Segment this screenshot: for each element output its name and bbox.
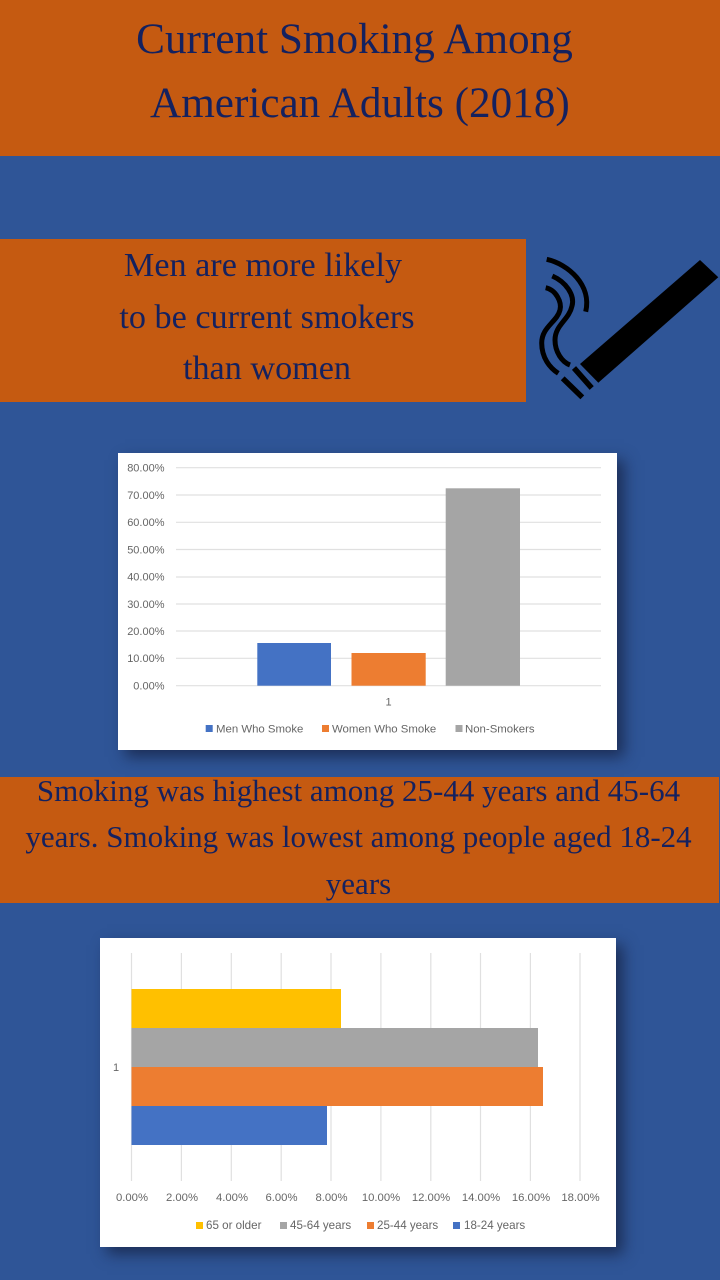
findings text: years. Smoking was lowest among people aged 18-24 xyxy=(25,819,692,854)
horizontal bar chart xyxy=(113,953,600,1232)
title xyxy=(136,16,573,127)
horizontal bar chart: 18-24 years xyxy=(464,1219,525,1232)
callout text: than women xyxy=(183,350,351,387)
bar chart: 80.00% xyxy=(127,462,165,474)
findings text: years xyxy=(326,866,391,900)
horizontal bar chart: 25-44 years xyxy=(377,1219,438,1232)
title: American Adults (2018) xyxy=(150,80,570,127)
age findings banner xyxy=(0,777,719,903)
horizontal bar chart: 18.00% xyxy=(561,1192,600,1204)
horizontal bar chart: 45-64 years xyxy=(290,1219,351,1232)
horizontal bar chart: 8.00% xyxy=(315,1192,348,1204)
bar chart: 60.00% xyxy=(127,517,165,529)
bar chart: 20.00% xyxy=(127,626,165,638)
findings text xyxy=(25,772,692,900)
panel: men vs women callout xyxy=(0,239,526,402)
bar chart: Men Who Smoke xyxy=(216,724,303,736)
callout text xyxy=(119,247,415,387)
callout text: to be current smokers xyxy=(119,298,415,336)
bar chart: 0.00% xyxy=(133,680,165,692)
horizontal bar chart: 6.00% xyxy=(265,1192,298,1204)
horizontal bar chart: 4.00% xyxy=(216,1192,248,1204)
horizontal bar chart: 1 xyxy=(113,1062,119,1074)
callout text: Men are more likely xyxy=(124,247,402,284)
horizontal bar chart: 16.00% xyxy=(512,1192,550,1204)
horizontal bar chart: 14.00% xyxy=(462,1192,500,1204)
bar chart: 40.00% xyxy=(127,572,165,584)
bar chart: 10.00% xyxy=(127,653,165,665)
panel: bar chart of smoking by sex xyxy=(118,453,617,750)
bar chart: 30.00% xyxy=(127,599,165,611)
horizontal bar chart: 0.00% xyxy=(116,1192,148,1204)
bar chart: 1 xyxy=(385,696,392,708)
horizontal bar chart: 65 or older xyxy=(206,1219,262,1232)
horizontal bar chart: 2.00% xyxy=(166,1192,198,1204)
title: Current Smoking Among xyxy=(136,16,573,63)
bar chart: 50.00% xyxy=(127,544,165,556)
bar chart: 70.00% xyxy=(127,490,165,502)
findings text: Smoking was highest among 25-44 years and 45-64 xyxy=(37,772,680,808)
horizontal bar chart: 10.00% xyxy=(362,1192,400,1204)
title banner xyxy=(0,0,720,156)
bar chart: Non-Smokers xyxy=(465,724,535,736)
bar chart xyxy=(127,462,601,736)
horizontal bar chart: 12.00% xyxy=(412,1192,450,1204)
bar chart: Women Who Smoke xyxy=(332,724,436,736)
icon: cigarette with smoke xyxy=(539,256,718,400)
panel: bar chart of smoking by age xyxy=(100,938,616,1247)
